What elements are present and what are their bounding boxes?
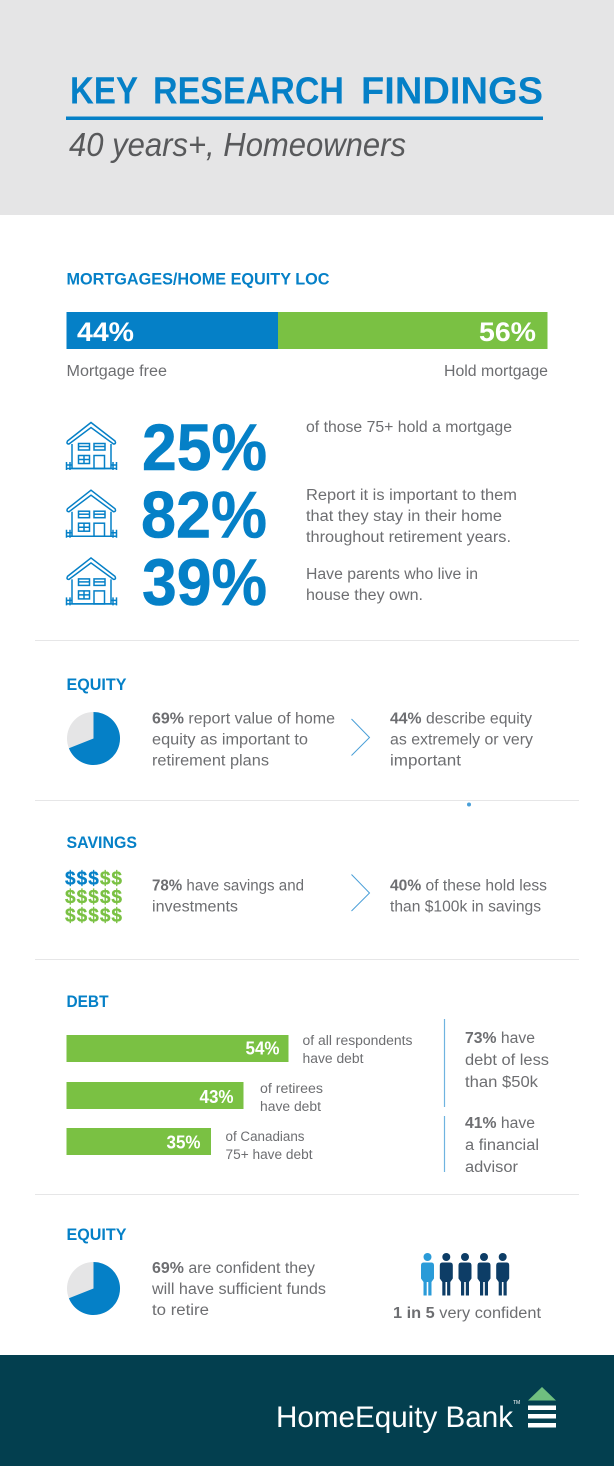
bar label: retirees: of retirees — [260, 1081, 323, 1096]
subtitle: 40 years+, Homeowners — [69, 126, 406, 163]
icon: dollar signs: $$$$$ — [65, 887, 122, 908]
heading: debt: DEBT — [66, 992, 109, 1011]
icon: dollar signs — [65, 868, 122, 926]
heading: mortgages: MORTGAGES/HOME EQUITY LOC — [66, 270, 330, 288]
icon: house 2 — [66, 490, 117, 538]
heading: equity 2: EQUITY — [66, 1225, 127, 1244]
text: 73% debt: debt of less — [465, 1052, 549, 1069]
icon: house 1 — [66, 422, 117, 470]
text: 44% describe: important — [390, 752, 462, 770]
bar: 54%: 54% — [246, 1038, 280, 1058]
text: 39% description — [306, 566, 478, 604]
text: 69% report: equity as important to — [152, 732, 308, 748]
bar label: all respondents — [302, 1033, 413, 1066]
text: 73% debt: 73% have — [465, 1030, 535, 1047]
bar label: retirees: have debt — [260, 1099, 321, 1114]
heading: equity: EQUITY — [66, 675, 127, 694]
stacked bar: mortgage split — [66, 312, 548, 349]
text: 44% describe: 44% describe equity — [390, 710, 532, 728]
bar: 43%: 43% — [200, 1087, 234, 1107]
text: 82% description: that they stay in their home — [306, 508, 502, 525]
text: 82% description: Report it is important to them — [306, 487, 517, 504]
icon: dollar signs: $$$$$ — [65, 906, 122, 926]
text: 1 in 5 very confident: 1 in 5 very confident — [393, 1305, 542, 1322]
big stat: 25%: 25% — [142, 410, 267, 484]
text: 41% advisor — [465, 1115, 539, 1176]
text: 44% describe — [390, 710, 533, 770]
bar: 54% — [66, 1035, 288, 1062]
text: 40% savings: than $100k in savings — [390, 898, 541, 916]
text: 69% confident: 69% are confident they — [152, 1260, 315, 1277]
icon: dollar signs: $$$$$ — [65, 868, 122, 890]
text: 41% advisor: advisor — [465, 1159, 518, 1176]
stray dot — [467, 802, 471, 806]
bar: 35%: 35% — [166, 1132, 200, 1152]
text: 69% report: retirement plans — [152, 752, 269, 770]
big stat: 82%: 82% — [141, 478, 267, 552]
stacked bar: mortgage split: 44% — [77, 317, 134, 347]
stacked bar: mortgage split: 56% — [479, 317, 536, 347]
text: 73% debt — [465, 1030, 549, 1091]
text: 82% description — [306, 487, 517, 546]
text: 41% advisor: a financial — [465, 1137, 539, 1154]
bar label: mortgage free: Mortgage free — [66, 363, 167, 380]
icon: house 3 — [66, 558, 117, 605]
text: 40% savings — [390, 878, 547, 916]
arrow: equity — [352, 719, 370, 756]
text: 25% description: of those 75+ hold a mortgage — [306, 419, 512, 436]
icon: five people — [421, 1253, 509, 1296]
bar label: hold mortgage: Hold mortgage — [444, 363, 548, 380]
text: 44% describe: as extremely or very — [390, 732, 533, 748]
person: dark 5 — [496, 1253, 509, 1296]
bar label: all respondents: have debt — [302, 1051, 364, 1066]
arrow: savings — [352, 874, 370, 911]
bar label: all respondents: of all respondents — [302, 1033, 413, 1048]
bar label: Canadians: 75+ have debt — [226, 1147, 313, 1162]
title underline — [66, 116, 543, 120]
pie chart: 69% confident — [67, 1262, 120, 1315]
text: 73% debt: than $50k — [465, 1074, 538, 1091]
title: RESEARCH — [153, 70, 344, 112]
bar chart: debt — [66, 1033, 413, 1162]
text: 69% confident: will have sufficient funds — [151, 1281, 326, 1298]
text: 82% description: throughout retirement years. — [306, 529, 511, 546]
text: 78% savings: investments — [152, 898, 238, 916]
trademark: TM — [513, 1400, 520, 1406]
text: 69% report: 69% report value of home — [152, 710, 335, 728]
bar: 35% — [66, 1128, 211, 1155]
big stat: 39%: 39% — [142, 545, 267, 619]
logo mark — [528, 1387, 556, 1428]
title: FINDINGS — [361, 70, 543, 112]
pie chart: 69% home equity — [67, 712, 120, 765]
person: dark 2 — [440, 1253, 453, 1296]
text: 40% savings: 40% of these hold less — [390, 878, 547, 894]
bar label: Canadians — [226, 1129, 313, 1162]
person: dark 4 — [478, 1253, 490, 1296]
title — [70, 70, 543, 112]
text: 39% description: house they own. — [306, 587, 423, 604]
footer band — [0, 1355, 614, 1466]
text: 69% report — [152, 710, 335, 770]
bar label: Canadians: of Canadians — [226, 1129, 305, 1144]
header panel — [0, 0, 614, 215]
text: 69% confident — [151, 1260, 326, 1319]
text: 39% description: Have parents who live in — [306, 566, 478, 583]
text: 41% advisor: 41% have — [465, 1115, 535, 1132]
bar label: retirees — [260, 1081, 323, 1114]
text: 78% savings: 78% have savings and — [152, 878, 304, 894]
person: dark 3 — [458, 1253, 472, 1296]
title: KEY — [70, 70, 138, 112]
text: 78% savings — [152, 878, 304, 916]
text: 69% confident: to retire — [152, 1302, 209, 1319]
bar: 43% — [66, 1082, 244, 1109]
person: highlighted — [421, 1253, 434, 1296]
heading: savings: SAVINGS — [66, 833, 137, 852]
logo wordmark: HomeEquity Bank — [276, 1401, 514, 1434]
